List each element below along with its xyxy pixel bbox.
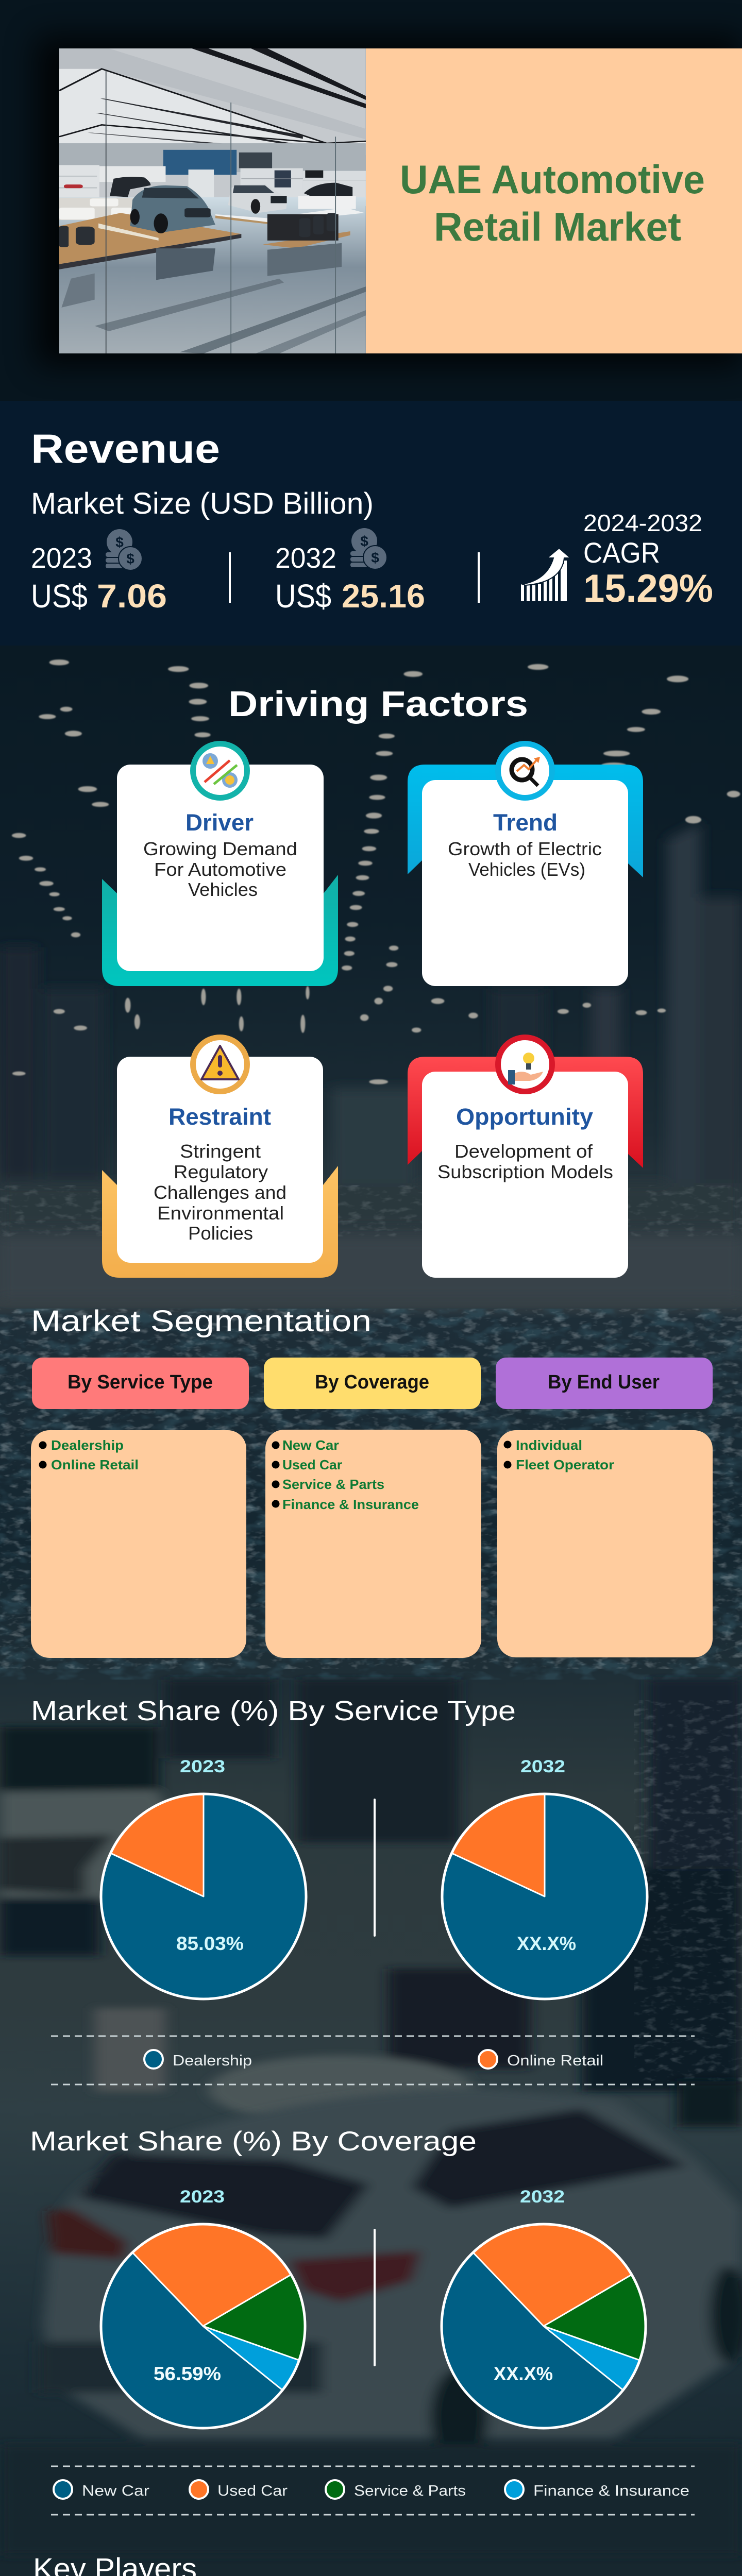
panel: revenue band bbox=[0, 401, 742, 646]
driver text: Vehicles bbox=[188, 879, 258, 900]
segment header: by service type bbox=[32, 1358, 249, 1409]
CAGR value: 15.29% bbox=[583, 567, 713, 611]
restraint text: Challenges and bbox=[154, 1182, 286, 1203]
icon: hand with bulb bbox=[495, 1035, 555, 1094]
restraint text bbox=[154, 1141, 286, 1244]
revenue 2023: 2023 bbox=[31, 542, 92, 574]
legend: coverage: Finance & Insurance bbox=[533, 2483, 689, 2499]
icon: coins 2032: $ bbox=[371, 550, 379, 566]
heading: market share by service type: Market Share (%) By Service Type bbox=[31, 1696, 516, 1726]
segment list: coverage bbox=[265, 1430, 481, 1658]
segment list: end user: Individual bbox=[516, 1437, 582, 1453]
pie chart: service type 2023: 2023 bbox=[180, 1757, 225, 1776]
segment header: by service type: By Service Type bbox=[68, 1371, 213, 1393]
opportunity text bbox=[437, 1141, 613, 1182]
icon: warning triangle bbox=[190, 1035, 250, 1094]
segment list: coverage: Service & Parts bbox=[282, 1477, 384, 1492]
heading: market segmentation: Market Segmentation bbox=[31, 1304, 372, 1338]
driver text: For Automotive bbox=[154, 859, 286, 880]
icon: driver gears and arrows bbox=[190, 741, 250, 801]
pie chart: service type 2032 bbox=[442, 1757, 647, 1999]
panel: opportunity bbox=[408, 1035, 643, 1278]
panel: trend bbox=[408, 741, 643, 986]
background photo: showroom crowd bbox=[0, 646, 742, 2576]
ceiling lights and pillars bbox=[0, 659, 742, 1299]
segment list: service type: Dealership bbox=[51, 1437, 124, 1453]
legend: coverage: New Car bbox=[82, 2483, 149, 2499]
segment list: end user: Fleet Operator bbox=[516, 1457, 614, 1472]
segment list: service type bbox=[31, 1430, 246, 1658]
pie chart: coverage 2023: 2023 bbox=[180, 2187, 225, 2207]
speckle on right-hand cars bbox=[634, 1700, 742, 2081]
segment header: by coverage: By Coverage bbox=[315, 1371, 429, 1393]
revenue 2032: 2032 bbox=[275, 542, 336, 574]
restraint text: Stringent bbox=[180, 1141, 261, 1162]
restraint text: Environmental bbox=[157, 1202, 284, 1224]
CAGR label: CAGR bbox=[583, 536, 660, 569]
pie chart: coverage 2032 bbox=[442, 2187, 646, 2428]
segment header: by end user: By End User bbox=[548, 1371, 660, 1393]
segment header: by coverage bbox=[264, 1358, 481, 1409]
trend text: Vehicles (EVs) bbox=[468, 859, 585, 880]
heading: market share by coverage: Market Share (%) By Coverage bbox=[30, 2126, 477, 2157]
segment list: coverage: New Car bbox=[282, 1437, 339, 1453]
icon: coins 2023 bbox=[106, 529, 142, 570]
opportunity text: Subscription Models bbox=[437, 1161, 613, 1182]
hero title: UAE Automotive bbox=[400, 157, 705, 202]
opportunity text: Development of bbox=[454, 1141, 593, 1162]
hero title: Retail Market bbox=[434, 204, 681, 249]
icon: coins 2032 bbox=[350, 528, 387, 569]
pie chart: service type 2032: XX.X% bbox=[517, 1933, 576, 1954]
legend: service type: Dealership bbox=[173, 2053, 252, 2069]
revenue 2023: 7.06 bbox=[97, 578, 167, 615]
opportunity heading: Opportunity bbox=[456, 1104, 593, 1130]
hero title panel bbox=[366, 48, 742, 353]
segment list: coverage: Used Car bbox=[282, 1457, 342, 1472]
trend heading: Trend bbox=[493, 809, 558, 836]
hero photo: car showroom bbox=[59, 48, 366, 353]
legend: coverage: Used Car bbox=[217, 2483, 288, 2499]
icon: growth arrow bbox=[521, 548, 570, 601]
crowd texture bbox=[0, 1309, 742, 1680]
revenue heading: Revenue bbox=[31, 426, 220, 471]
segment list: end user bbox=[497, 1430, 713, 1657]
revenue 2032 bbox=[275, 528, 425, 615]
segment header: by end user bbox=[496, 1358, 713, 1409]
car in coverage section bbox=[3, 2078, 742, 2448]
CAGR period: 2024-2032 bbox=[583, 510, 702, 536]
cars and people by service type section bbox=[0, 1680, 742, 2124]
trend text bbox=[448, 838, 602, 880]
driver text: Growing Demand bbox=[143, 838, 297, 859]
pie chart: coverage 2032: XX.X% bbox=[494, 2363, 553, 2384]
revenue 2023: US$ bbox=[31, 578, 88, 615]
legend: coverage bbox=[54, 2480, 689, 2499]
pie chart: coverage 2023: 56.59% bbox=[154, 2363, 221, 2384]
restraint text: Regulatory bbox=[174, 1161, 268, 1182]
driver heading: Driver bbox=[185, 809, 254, 836]
legend: service type: Online Retail bbox=[507, 2053, 603, 2069]
pie chart: service type 2023 bbox=[101, 1757, 306, 1999]
panel: driver bbox=[102, 741, 338, 986]
panel: restraint bbox=[102, 1035, 338, 1278]
driver text bbox=[143, 838, 297, 900]
pie chart: service type 2032: 2032 bbox=[520, 1757, 565, 1776]
restraint text: Policies bbox=[188, 1223, 253, 1244]
top dark background bbox=[0, 0, 742, 401]
legend: service type bbox=[144, 2050, 603, 2069]
revenue 2032: US$ bbox=[275, 578, 331, 615]
icon: coins 2023: $ bbox=[115, 534, 124, 550]
restraint heading: Restraint bbox=[168, 1104, 271, 1130]
icon: trend magnifier bbox=[495, 741, 555, 801]
revenue 2023 bbox=[31, 529, 167, 615]
market size subheading: Market Size (USD Billion) bbox=[31, 487, 374, 520]
hero title bbox=[400, 157, 705, 249]
heading: driving factors: Driving Factors bbox=[228, 684, 528, 724]
segment list: service type: Online Retail bbox=[51, 1457, 139, 1472]
hero shadow bbox=[36, 36, 742, 366]
trend text: Growth of Electric bbox=[448, 838, 602, 859]
pie chart: coverage 2023 bbox=[101, 2187, 305, 2428]
icon: coins 2023: $ bbox=[126, 551, 134, 567]
legend: coverage: Service & Parts bbox=[354, 2483, 466, 2499]
icon: coins 2032: $ bbox=[360, 533, 368, 549]
segment list: coverage: Finance & Insurance bbox=[282, 1497, 419, 1512]
revenue 2032: 25.16 bbox=[342, 578, 425, 615]
pie chart: service type 2023: 85.03% bbox=[176, 1933, 244, 1954]
pie chart: coverage 2032: 2032 bbox=[520, 2187, 565, 2207]
